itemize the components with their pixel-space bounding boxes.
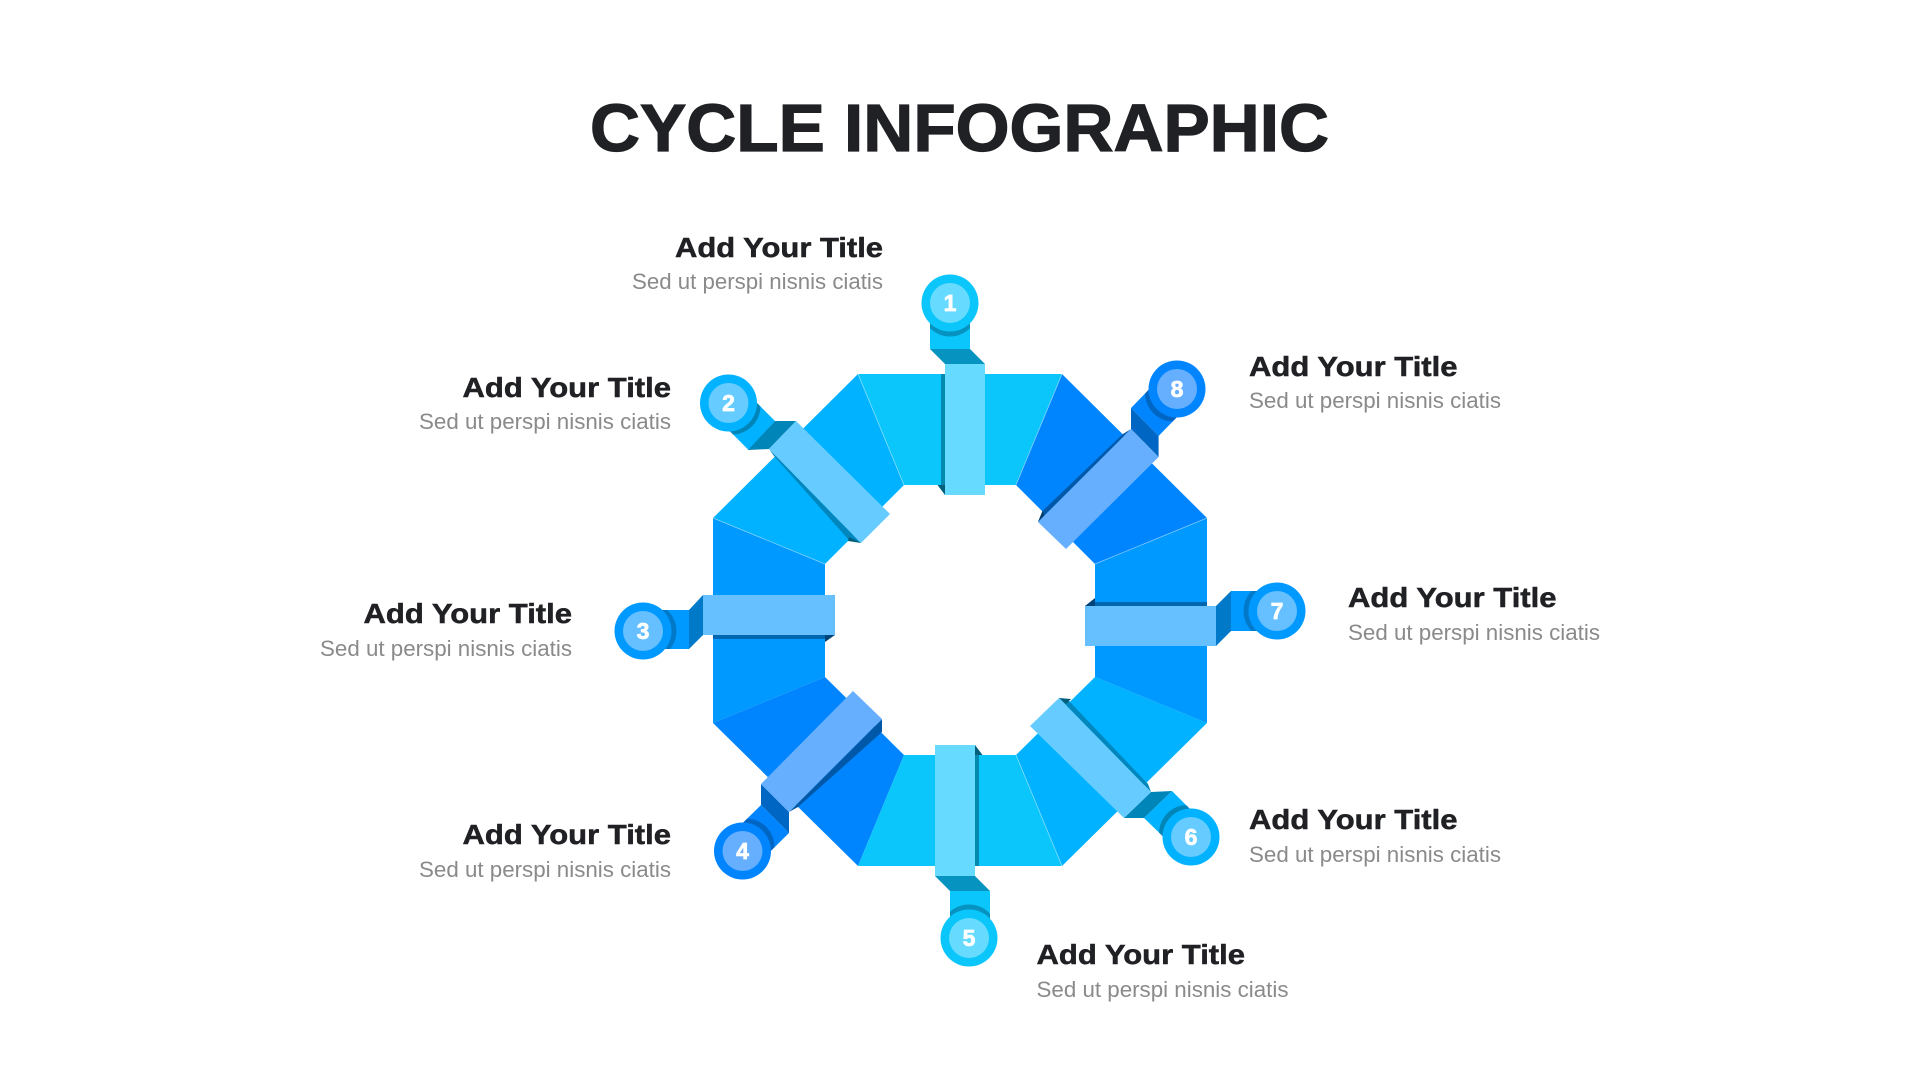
label 2: Sed ut perspi nisnis ciatis (419, 409, 671, 434)
label 4 (419, 819, 671, 882)
label 3 (320, 598, 572, 661)
label 8: Sed ut perspi nisnis ciatis (1249, 388, 1501, 413)
step 7 band and marker (1085, 582, 1306, 646)
step 3 band and marker: 3 (637, 618, 649, 644)
step 5 band and marker (935, 745, 998, 966)
step 7 band and marker: 7 (1271, 598, 1283, 624)
label 8 (1249, 351, 1501, 413)
step 4 band and marker: 4 (736, 838, 749, 864)
label 6: Sed ut perspi nisnis ciatis (1249, 842, 1501, 867)
label 4: Add Your Title (462, 819, 671, 850)
label 7 (1348, 582, 1600, 645)
sector: left (713, 518, 825, 723)
step 6 band and marker: 6 (1185, 824, 1197, 850)
sector: lower right (1016, 677, 1207, 866)
step 4 band and marker (714, 691, 882, 880)
sector: bottom (858, 755, 1062, 866)
label 3: Add Your Title (364, 598, 572, 629)
label 6 (1249, 804, 1501, 867)
step 5 band and marker: 5 (963, 925, 976, 951)
label 1 (632, 232, 883, 294)
step 8 band and marker: 8 (1171, 376, 1184, 402)
sector: right (1095, 518, 1207, 723)
sector: top (858, 374, 1062, 485)
label 1: Add Your Title (675, 232, 883, 263)
sector: lower left (713, 677, 904, 866)
label 5: Sed ut perspi nisnis ciatis (1036, 977, 1288, 1002)
octagonal ring (713, 374, 1207, 866)
label 2 (419, 372, 671, 434)
step 8 band and marker (1038, 360, 1206, 549)
step 2 band and marker (700, 374, 890, 543)
label 7: Add Your Title (1348, 582, 1556, 613)
label 6: Add Your Title (1249, 804, 1458, 835)
label 5: Add Your Title (1036, 939, 1245, 970)
step 1 band and marker (922, 274, 985, 495)
label 3: Sed ut perspi nisnis ciatis (320, 636, 572, 661)
step 3 band and marker (614, 595, 835, 660)
sector: upper right (1016, 374, 1207, 564)
label 7: Sed ut perspi nisnis ciatis (1348, 620, 1600, 645)
label 4: Sed ut perspi nisnis ciatis (419, 857, 671, 882)
title: CYCLE INFOGRAPHIC (590, 91, 1329, 166)
label 1: Sed ut perspi nisnis ciatis (632, 269, 883, 294)
label 2: Add Your Title (462, 372, 671, 403)
label 8: Add Your Title (1249, 351, 1458, 382)
sector: upper left (713, 374, 904, 564)
step 1 band and marker: 1 (944, 290, 957, 316)
step 2 band and marker: 2 (722, 390, 735, 416)
label 5 (1036, 939, 1288, 1002)
step 6 band and marker (1030, 698, 1220, 866)
